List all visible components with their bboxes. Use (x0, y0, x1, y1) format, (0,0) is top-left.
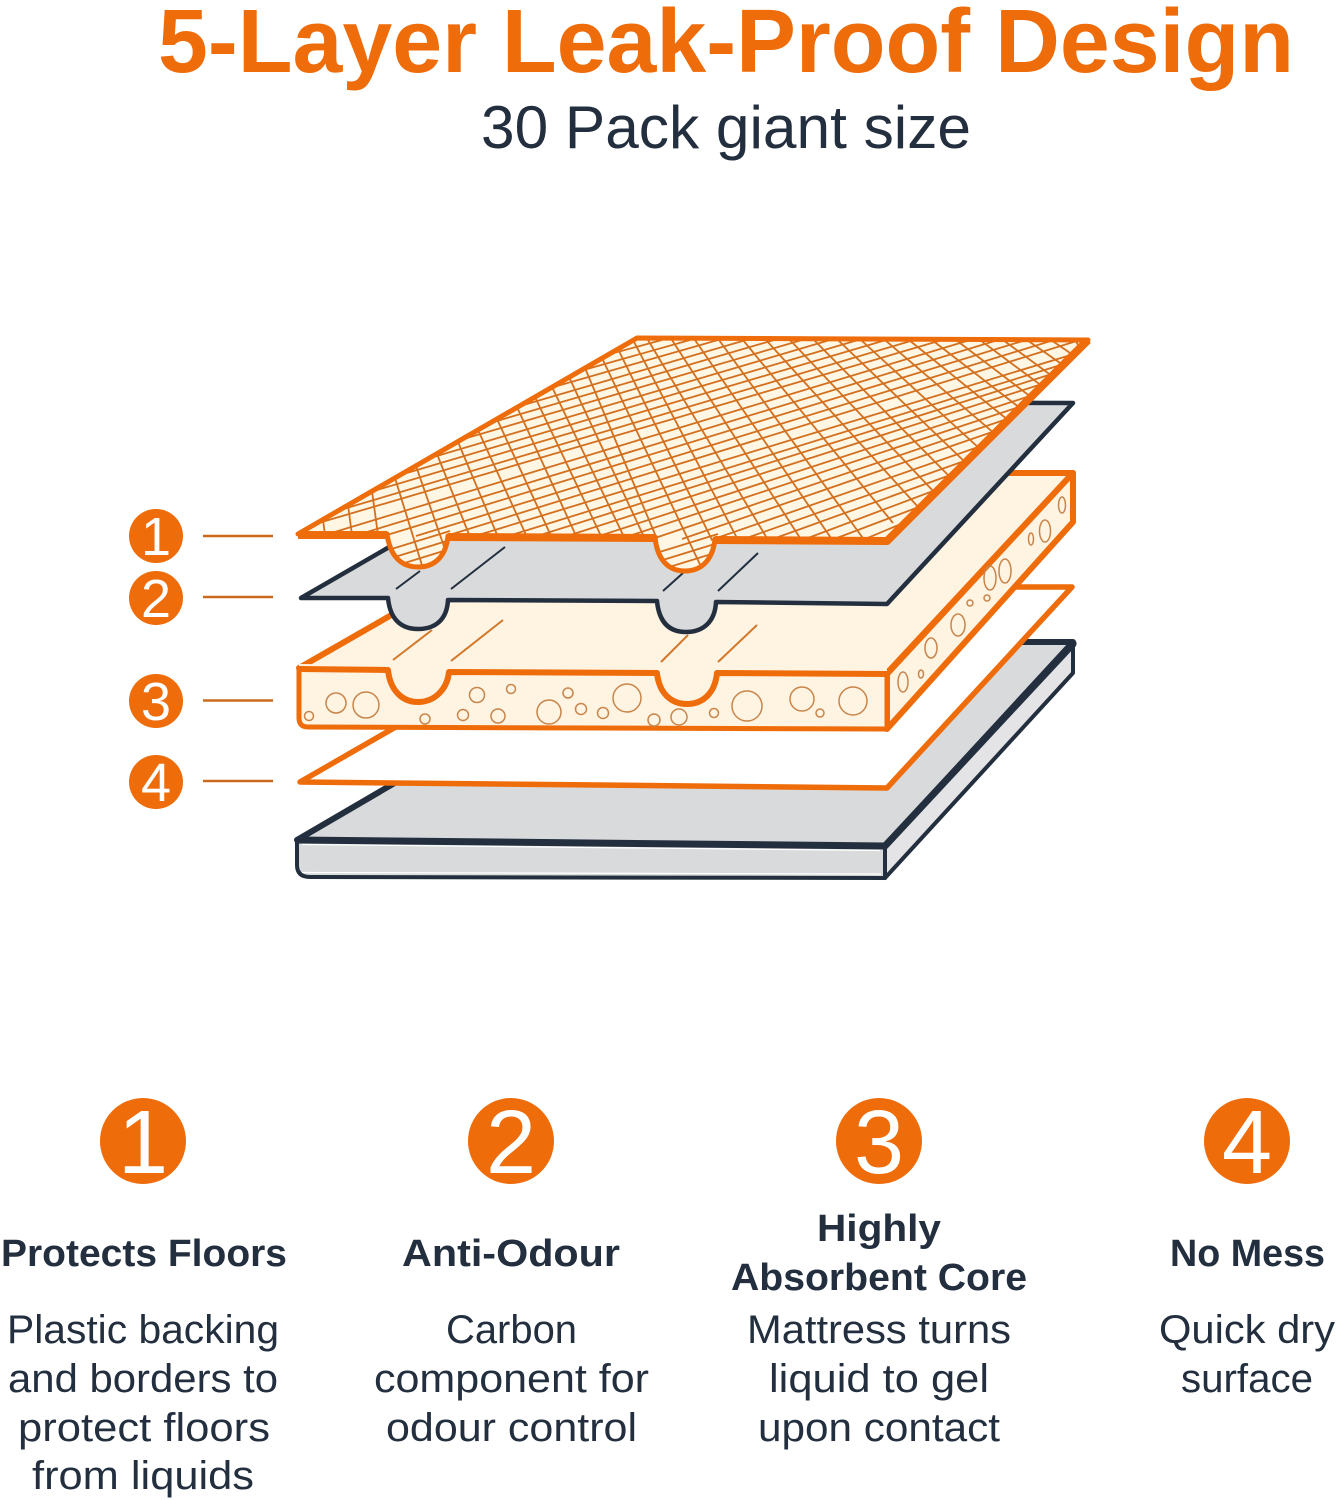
icon: number 1 (100, 1093, 186, 1193)
layer 3: absorbent foam core (299, 473, 1073, 729)
subtitle: 30 Pack giant size (481, 94, 971, 161)
icon: number 3 (836, 1093, 922, 1193)
description: Carbon (446, 1308, 577, 1352)
icon: number 3: 3 (854, 1093, 904, 1193)
icon: number 1: 1 (118, 1093, 168, 1193)
description (7, 1308, 279, 1498)
column 4: no mess (1159, 1093, 1335, 1401)
layer 5: grey base (297, 642, 1073, 878)
description: protect floors (18, 1406, 270, 1450)
description: upon contact (758, 1406, 1000, 1450)
heading (731, 1208, 1027, 1299)
column 1: protects floors (1, 1093, 287, 1498)
icon: number 4 (1204, 1093, 1290, 1193)
diagram: exploded pad layers (297, 338, 1088, 878)
callout 4: 4 (141, 753, 171, 813)
callout 3: 3 (141, 672, 171, 732)
heading: Anti-Odour (402, 1233, 620, 1275)
description: Quick dry (1159, 1308, 1335, 1352)
icon: number 2: 2 (486, 1093, 536, 1193)
icon: number 4: 4 (1222, 1093, 1272, 1193)
callout 2 (129, 569, 273, 629)
layer 4: white quick-dry sheet (300, 587, 1072, 788)
heading: Absorbent Core (731, 1257, 1027, 1299)
column 2: anti-odour (374, 1093, 649, 1450)
description: from liquids (32, 1454, 254, 1498)
callout 3 (129, 672, 273, 732)
description: liquid to gel (769, 1357, 989, 1401)
heading: Highly (817, 1208, 941, 1250)
description: Mattress turns (747, 1308, 1011, 1352)
callout 1: 1 (141, 507, 171, 567)
description (1159, 1308, 1335, 1401)
layer 1: orange mesh top sheet (298, 338, 1088, 590)
description: surface (1181, 1357, 1313, 1401)
callout 2: 2 (141, 569, 171, 629)
description: odour control (386, 1406, 637, 1450)
callout 4 (129, 753, 273, 813)
description (747, 1308, 1011, 1450)
description (374, 1308, 649, 1450)
column 3: highly absorbent core (731, 1093, 1027, 1450)
description: and borders to (8, 1357, 278, 1401)
callout 1 (129, 507, 273, 567)
description: component for (374, 1357, 649, 1401)
icon: number 2 (468, 1093, 554, 1193)
description: Plastic backing (7, 1308, 279, 1352)
layer 2: grey anti-odour carbon sheet (301, 402, 1073, 632)
heading: No Mess (1170, 1233, 1325, 1275)
heading: Protects Floors (1, 1233, 287, 1275)
